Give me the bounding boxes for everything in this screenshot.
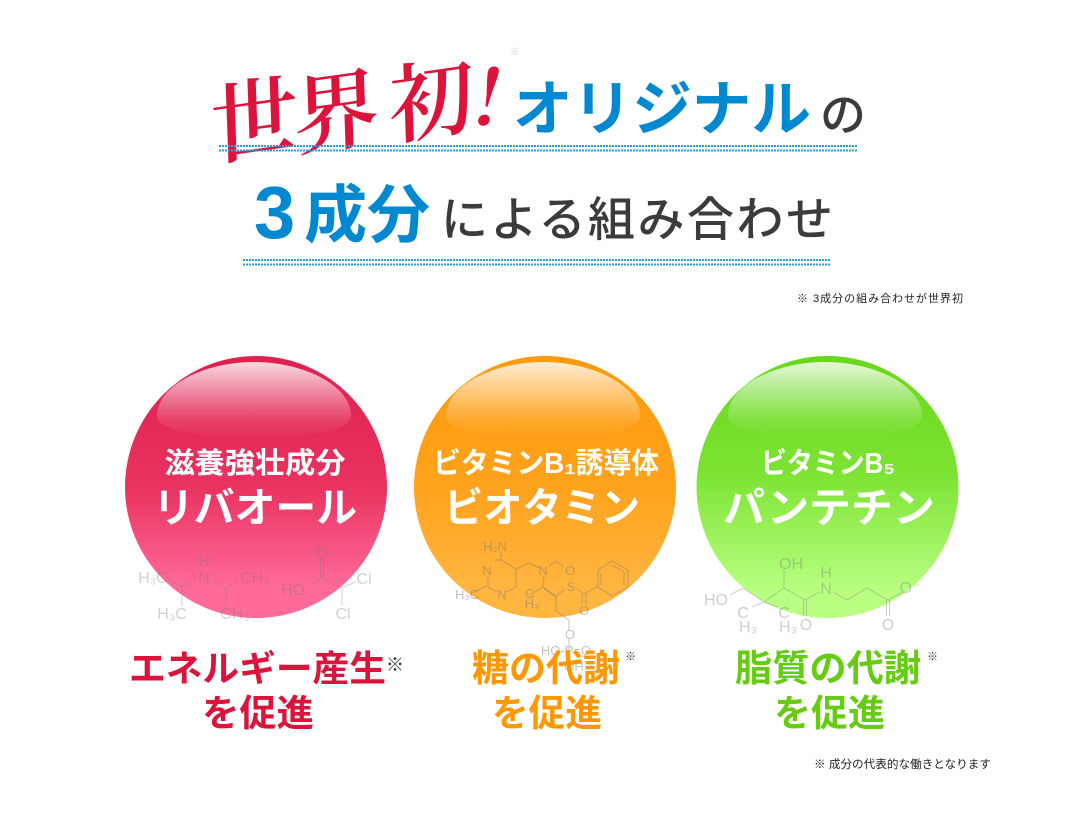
ingredient name: パンテチン bbox=[723, 485, 935, 531]
molecule: pantethine: C bbox=[778, 605, 790, 622]
sphere: green bbox=[696, 356, 958, 618]
ingredient category: 滋養強壮成分 bbox=[164, 447, 346, 480]
molecule: pantethine bbox=[704, 556, 920, 636]
panel: pantethine bbox=[696, 356, 958, 734]
molecule: pantethine: N bbox=[820, 581, 832, 598]
molecule: bisbentiamine-like structure: HO-P=O bbox=[541, 643, 591, 658]
molecule: bisbentiamine-like structure: N bbox=[482, 563, 492, 578]
dotted underline one bbox=[219, 146, 858, 150]
heading particle: の bbox=[820, 89, 866, 141]
molecule: bisbentiamine-like structure: O bbox=[565, 627, 575, 642]
dotted underline two bbox=[243, 260, 830, 264]
molecule: diisopropylamine and dichloroacetate bbox=[138, 545, 372, 623]
effect: fat metabolism: 脂質の代謝 bbox=[735, 648, 921, 689]
sphere: red bbox=[125, 356, 387, 618]
molecule: diisopropylamine and dichloroacetate: O bbox=[316, 545, 328, 562]
molecule: bisbentiamine-like structure: H₂N bbox=[483, 539, 507, 554]
heading: world first original three ingredients bbox=[208, 27, 866, 265]
footnote: world first: ※ 3成分の組み合わせが世界初 bbox=[797, 291, 963, 305]
effect: energy production: エネルギー産生 bbox=[129, 648, 386, 689]
heading line two: ingredients word: 成分 bbox=[304, 181, 430, 251]
molecule: diisopropylamine and dichloroacetate: H bbox=[198, 553, 210, 570]
molecule: pantethine: O bbox=[882, 617, 894, 634]
ingredient category: ビタミンB₁誘導体 bbox=[433, 447, 659, 480]
molecule: pantethine: H bbox=[820, 565, 832, 582]
molecule: pantethine: OH bbox=[779, 556, 803, 573]
heading line two: three ingredients: 3 bbox=[254, 171, 295, 254]
heading line one: original: オリジナル bbox=[513, 76, 811, 143]
molecule: bisbentiamine-like structure: S bbox=[567, 579, 576, 594]
reference mark: ※ bbox=[927, 651, 938, 663]
effect: promote: を促進 bbox=[492, 693, 602, 734]
reference mark: ※ bbox=[386, 655, 404, 675]
molecule: diisopropylamine and dichloroacetate: CH₃ bbox=[220, 606, 250, 623]
molecule: pantethine: O⁻ bbox=[900, 580, 920, 597]
molecule: pantethine: HO bbox=[704, 592, 728, 609]
molecule: diisopropylamine and dichloroacetate: N bbox=[198, 570, 210, 587]
molecule: bisbentiamine-like structure: N bbox=[497, 587, 507, 602]
heading line two: combination: による組み合わせ bbox=[441, 193, 833, 246]
ingredient name: リバオール bbox=[153, 485, 357, 531]
molecule: bisbentiamine-like structure: N bbox=[538, 563, 548, 578]
molecule: diisopropylamine and dichloroacetate: Cl bbox=[335, 606, 351, 623]
heading accent: world first: 初 bbox=[387, 27, 476, 163]
molecule: diisopropylamine and dichloroacetate: H₃C bbox=[157, 606, 187, 623]
effect: promote: を促進 bbox=[774, 693, 885, 734]
molecule: diisopropylamine and dichloroacetate: Cl bbox=[356, 571, 372, 588]
heading accent: world first bbox=[208, 27, 513, 184]
ingredient category: ビタミンB₅ bbox=[761, 447, 895, 480]
molecule: diisopropylamine and dichloroacetate: CH₃ bbox=[240, 570, 270, 587]
molecule: diisopropylamine and dichloroacetate: H₃C bbox=[138, 570, 168, 587]
molecule: pantethine: C bbox=[737, 605, 749, 622]
heading accent: world first: 世 bbox=[208, 45, 300, 184]
panel: biotamin bbox=[414, 356, 676, 734]
molecule: bisbentiamine-like structure bbox=[455, 539, 628, 674]
molecule: bisbentiamine-like structure: H₃ bbox=[525, 596, 539, 611]
effect: sugar metabolism: 糖の代謝 bbox=[472, 648, 620, 689]
molecule: pantethine: H₃ bbox=[739, 619, 757, 636]
molecule: bisbentiamine-like structure: C bbox=[525, 586, 535, 601]
ingredient name: ビオタミン bbox=[444, 485, 640, 531]
heading accent: world first: 界 bbox=[292, 38, 381, 174]
molecule: pantethine: O bbox=[800, 617, 812, 634]
reference mark: ※ bbox=[625, 651, 636, 663]
panel: riboule bbox=[125, 356, 404, 734]
heading accent: world first: ! bbox=[466, 36, 513, 148]
effect: promote: を促進 bbox=[202, 693, 314, 734]
sphere: orange bbox=[414, 356, 676, 618]
molecule: bisbentiamine-like structure: O bbox=[579, 603, 589, 618]
molecule: pantethine: H₃ bbox=[779, 619, 797, 636]
molecule: bisbentiamine-like structure: OH bbox=[564, 659, 584, 674]
footnote: typical actions: ※ 成分の代表的な働きとなります bbox=[814, 757, 991, 771]
molecule: bisbentiamine-like structure: H₃C bbox=[455, 587, 479, 602]
molecule: bisbentiamine-like structure: O bbox=[565, 563, 575, 578]
small reference mark: ※ bbox=[510, 47, 520, 58]
molecule: diisopropylamine and dichloroacetate: HO bbox=[281, 582, 305, 599]
